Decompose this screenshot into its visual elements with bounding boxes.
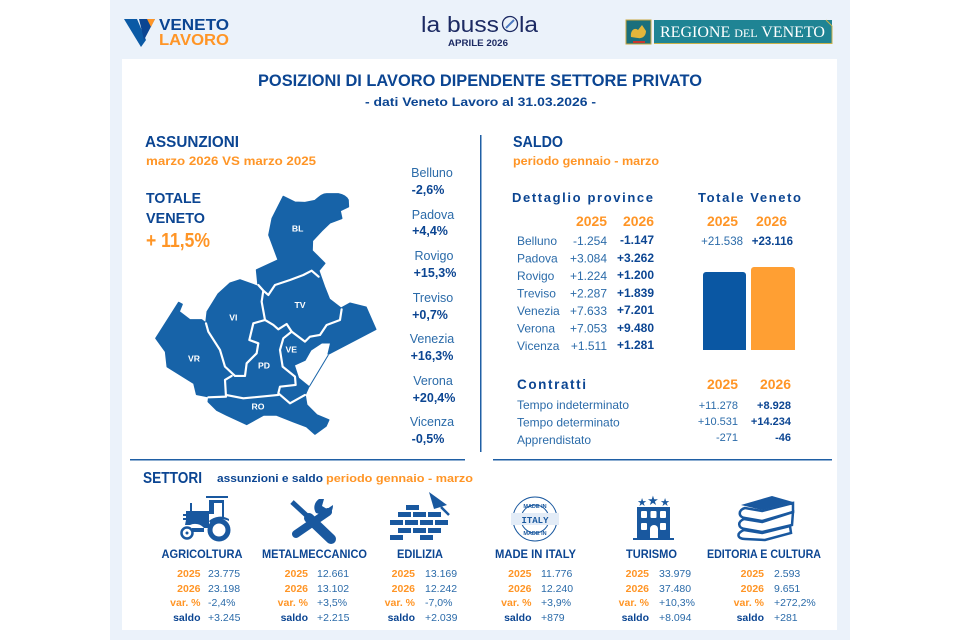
icon: hotel: ★ bbox=[660, 497, 670, 509]
subheading: marzo: marzo 2026 VS marzo 2025 bbox=[146, 154, 316, 168]
sector: metalmeccanico: saldo bbox=[281, 612, 308, 624]
sector: agricoltura: 23.775 bbox=[208, 568, 240, 580]
sector: turismo: saldo bbox=[622, 612, 649, 624]
sector: agricoltura: -2,4% bbox=[208, 597, 235, 609]
table: contratti: -46 bbox=[775, 432, 791, 444]
sector: edilizia: 12.242 bbox=[425, 583, 457, 595]
map: province del Veneto: VI bbox=[229, 312, 237, 322]
sector: edilizia: -7,0% bbox=[425, 597, 452, 609]
icon: bricks and trowel bbox=[390, 492, 449, 540]
icon: hotel: ★ bbox=[637, 497, 647, 509]
sector: turismo: 33.979 bbox=[659, 568, 691, 580]
sector: editoria e cultura: 2025 bbox=[741, 568, 764, 580]
sector: metalmeccanico: 13.102 bbox=[317, 583, 349, 595]
panel: settori bbox=[143, 470, 821, 624]
table: dettaglio province bbox=[512, 190, 654, 353]
heading: settori: SETTORI bbox=[143, 470, 202, 487]
sector: agricoltura: 23.198 bbox=[208, 583, 240, 595]
table: dettaglio province: -1.147 bbox=[620, 233, 654, 247]
map: province del Veneto: RO bbox=[251, 402, 265, 412]
table: dettaglio province: Rovigo bbox=[517, 269, 555, 283]
sector: agricoltura: 2025 bbox=[177, 568, 201, 580]
vertical divider bbox=[480, 135, 482, 452]
table: dettaglio province: +7.633 bbox=[570, 304, 607, 318]
icon: hotel bbox=[633, 493, 674, 540]
sector: editoria e cultura: +272,2% bbox=[774, 597, 816, 609]
sector: editoria e cultura: +281 bbox=[774, 612, 798, 624]
sector: agricoltura: +3.245 bbox=[208, 612, 241, 624]
table: contratti: Tempo indeterminato bbox=[517, 398, 629, 412]
panel: assunzioni bbox=[145, 134, 456, 446]
sector: made in italy: 11.776 bbox=[541, 568, 572, 580]
sector: editoria e cultura: 2.593 bbox=[774, 568, 800, 580]
logo: Veneto Lavoro: LAVORO bbox=[159, 32, 229, 49]
list: variazione per provincia: +16,3% bbox=[411, 349, 453, 363]
list: variazione per provincia: -2,6% bbox=[412, 183, 444, 197]
table: contratti: Contratti bbox=[517, 377, 586, 392]
sector: metalmeccanico: 2026 bbox=[285, 583, 308, 595]
table: contratti bbox=[517, 376, 792, 447]
sector: turismo bbox=[619, 493, 695, 624]
table: contratti: +10.531 bbox=[698, 416, 738, 428]
sector: agricoltura: 2026 bbox=[177, 583, 201, 595]
sector: made in italy: 2026 bbox=[508, 583, 532, 595]
table: contratti: +8.928 bbox=[757, 400, 791, 412]
chart: totale veneto: +23.116 bbox=[752, 236, 793, 248]
sector: edilizia: var. % bbox=[385, 597, 416, 609]
list: variazione per provincia bbox=[410, 166, 456, 446]
table: contratti: Tempo determinato bbox=[517, 416, 620, 430]
sector: made in italy: 12.240 bbox=[541, 583, 573, 595]
icon: books bbox=[738, 496, 793, 540]
list: variazione per provincia: Padova bbox=[412, 208, 454, 222]
list: variazione per provincia: Rovigo bbox=[415, 249, 453, 263]
list: variazione per provincia: Treviso bbox=[413, 291, 453, 305]
map: province del Veneto bbox=[156, 194, 376, 434]
table: dettaglio province: Padova bbox=[517, 252, 558, 266]
heading: assunzioni: ASSUNZIONI bbox=[145, 134, 239, 151]
table: contratti: Apprendistato bbox=[517, 433, 591, 447]
logo: Veneto Lavoro: VENETO bbox=[159, 17, 229, 34]
logo: Regione del Veneto: REGIONE DEL VENETO bbox=[660, 24, 825, 41]
sector: made in italy: MADE IN ITALY bbox=[495, 547, 576, 561]
subheading: settori: assunzioni e saldo bbox=[217, 473, 323, 485]
table: contratti: +11.278 bbox=[699, 400, 738, 412]
sector: edilizia: 13.169 bbox=[425, 568, 457, 580]
table: dettaglio province: +1.200 bbox=[617, 268, 654, 282]
sector: turismo: 2026 bbox=[626, 583, 649, 595]
table: dettaglio province: Belluno bbox=[517, 234, 557, 248]
chart: totale veneto: +21.538 bbox=[701, 236, 743, 248]
list: variazione per provincia: +0,7% bbox=[412, 308, 448, 322]
table: contratti: +14.234 bbox=[751, 416, 792, 428]
sector: metalmeccanico: +3,5% bbox=[317, 597, 347, 609]
sector: metalmeccanico: 12.661 bbox=[317, 568, 349, 580]
list: variazione per provincia: +15,3% bbox=[414, 266, 456, 280]
sector: made in italy bbox=[495, 497, 576, 624]
chart: totale veneto bbox=[698, 190, 801, 350]
sector: metalmeccanico: +2.215 bbox=[317, 612, 350, 624]
chart: totale veneto: Totale Veneto bbox=[698, 190, 801, 205]
icon: hotel: ★ bbox=[647, 493, 659, 508]
logo: Regione del Veneto bbox=[626, 20, 832, 44]
sector: made in italy: +879 bbox=[541, 612, 565, 624]
sector: turismo: var. % bbox=[619, 597, 650, 609]
sector: editoria e cultura: 2026 bbox=[741, 583, 764, 595]
logo: la bussola: la bbox=[519, 12, 539, 37]
horizontal divider left bbox=[130, 459, 465, 460]
table: dettaglio province: Verona bbox=[517, 322, 555, 336]
sector: made in italy: var. % bbox=[501, 597, 532, 609]
list: variazione per provincia: Belluno bbox=[411, 166, 453, 180]
list: variazione per provincia: Verona bbox=[413, 374, 453, 388]
table: dettaglio province: 2025 bbox=[576, 213, 607, 229]
chart: totale veneto: 2025 bbox=[707, 213, 738, 229]
sector: metalmeccanico bbox=[262, 499, 367, 624]
sector: metalmeccanico: 2025 bbox=[285, 568, 308, 580]
icon: made in italy stamp: MADE IN bbox=[523, 504, 547, 510]
main white card bbox=[122, 59, 837, 630]
table: dettaglio province: +1.281 bbox=[617, 338, 654, 352]
table: dettaglio province: +9.480 bbox=[617, 321, 654, 335]
totale veneto callout: + 11,5% bbox=[146, 230, 210, 252]
sector: edilizia: 2025 bbox=[392, 568, 415, 580]
sector: editoria e cultura bbox=[707, 496, 821, 624]
logo: la bussola: la buss bbox=[421, 12, 499, 37]
table: dettaglio province: +3.084 bbox=[570, 252, 607, 266]
table: dettaglio province: Dettaglio province bbox=[512, 190, 653, 205]
map: province del Veneto: VE bbox=[286, 345, 297, 355]
sector: turismo: 2025 bbox=[626, 568, 649, 580]
table: contratti: 2025 bbox=[707, 376, 738, 392]
table: dettaglio province: Vicenza bbox=[517, 339, 560, 353]
sector: editoria e cultura: saldo bbox=[737, 612, 764, 624]
panel: saldo bbox=[512, 134, 801, 447]
list: variazione per provincia: Venezia bbox=[410, 332, 454, 346]
chart: totale veneto: 2026 bbox=[756, 213, 787, 229]
totale veneto callout: VENETO bbox=[146, 210, 205, 227]
sector: turismo: 37.480 bbox=[659, 583, 691, 595]
sector: made in italy: +3,9% bbox=[541, 597, 571, 609]
table: dettaglio province: +7.201 bbox=[617, 303, 654, 317]
table: dettaglio province: -1.254 bbox=[573, 234, 607, 248]
table: dettaglio province: +3.262 bbox=[617, 251, 654, 265]
totale veneto callout bbox=[146, 190, 210, 252]
totale veneto callout: TOTALE bbox=[146, 190, 201, 207]
subheading: settori: periodo gennaio - marzo bbox=[326, 473, 473, 485]
sector: edilizia: +2.039 bbox=[425, 612, 458, 624]
map: province del Veneto: TV bbox=[294, 300, 306, 310]
table: dettaglio province: Treviso bbox=[517, 286, 556, 300]
subtitle: - dati Veneto Lavoro al 31.03.2026 - bbox=[365, 95, 596, 109]
icon: wrench and screwdriver bbox=[292, 499, 333, 539]
sector: edilizia bbox=[385, 492, 458, 624]
heading: saldo: SALDO bbox=[513, 134, 563, 151]
table: dettaglio province: +2.287 bbox=[570, 286, 607, 300]
icon: tractor bbox=[182, 496, 229, 539]
sector: made in italy: saldo bbox=[504, 612, 532, 624]
list: variazione per provincia: -0,5% bbox=[412, 432, 444, 446]
table: dettaglio province: 2026 bbox=[623, 213, 654, 229]
map: province del Veneto: BL bbox=[292, 224, 304, 234]
map: province del Veneto: VR bbox=[188, 353, 201, 363]
sector: editoria e cultura: 9.651 bbox=[774, 583, 800, 595]
table: dettaglio province: +7.053 bbox=[570, 322, 607, 336]
logo: la bussola: APRILE 2026 bbox=[448, 38, 508, 48]
sector: editoria e cultura: var. % bbox=[734, 597, 765, 609]
sector: edilizia: EDILIZIA bbox=[397, 547, 443, 561]
subheading: periodo: periodo gennaio - marzo bbox=[513, 154, 659, 168]
table: contratti: -271 bbox=[716, 432, 738, 444]
sector: turismo: +10,3% bbox=[659, 597, 695, 609]
icon: made in italy stamp bbox=[511, 497, 559, 541]
sector: agricoltura: var. % bbox=[170, 597, 201, 609]
sector: turismo: +8.094 bbox=[659, 612, 692, 624]
list: variazione per provincia: +20,4% bbox=[413, 391, 455, 405]
map: province del Veneto: PD bbox=[258, 360, 270, 370]
table: dettaglio province: Venezia bbox=[517, 304, 560, 318]
horizontal divider right bbox=[493, 459, 832, 460]
table: dettaglio province: +1.511 bbox=[571, 339, 607, 353]
icon: made in italy stamp: ITALY bbox=[521, 516, 549, 526]
sector: edilizia: 2026 bbox=[392, 583, 415, 595]
sector: agricoltura: AGRICOLTURA bbox=[162, 547, 243, 561]
sector: metalmeccanico: METALMECCANICO bbox=[262, 547, 367, 561]
title: POSIZIONI DI LAVORO DIPENDENTE SETTORE PRIVATO bbox=[258, 71, 702, 90]
sector: edilizia: saldo bbox=[388, 612, 415, 624]
table: dettaglio province: +1.224 bbox=[570, 269, 607, 283]
list: variazione per provincia: +4,4% bbox=[412, 224, 448, 238]
sector: editoria e cultura: EDITORIA E CULTURA bbox=[707, 547, 821, 561]
logo: Veneto Lavoro bbox=[124, 17, 229, 49]
table: contratti: 2026 bbox=[760, 376, 791, 392]
subheading: settori bbox=[217, 473, 473, 485]
sector: agricoltura bbox=[162, 496, 243, 624]
sector: turismo: TURISMO bbox=[626, 547, 677, 561]
sector: made in italy: 2025 bbox=[508, 568, 532, 580]
sector: metalmeccanico: var. % bbox=[278, 597, 309, 609]
list: variazione per provincia: Vicenza bbox=[410, 415, 454, 429]
table: dettaglio province: +1.839 bbox=[617, 286, 654, 300]
sector: agricoltura: saldo bbox=[173, 612, 200, 624]
logo: la bussola bbox=[421, 12, 539, 48]
icon: made in italy stamp: MADE IN bbox=[523, 531, 547, 537]
